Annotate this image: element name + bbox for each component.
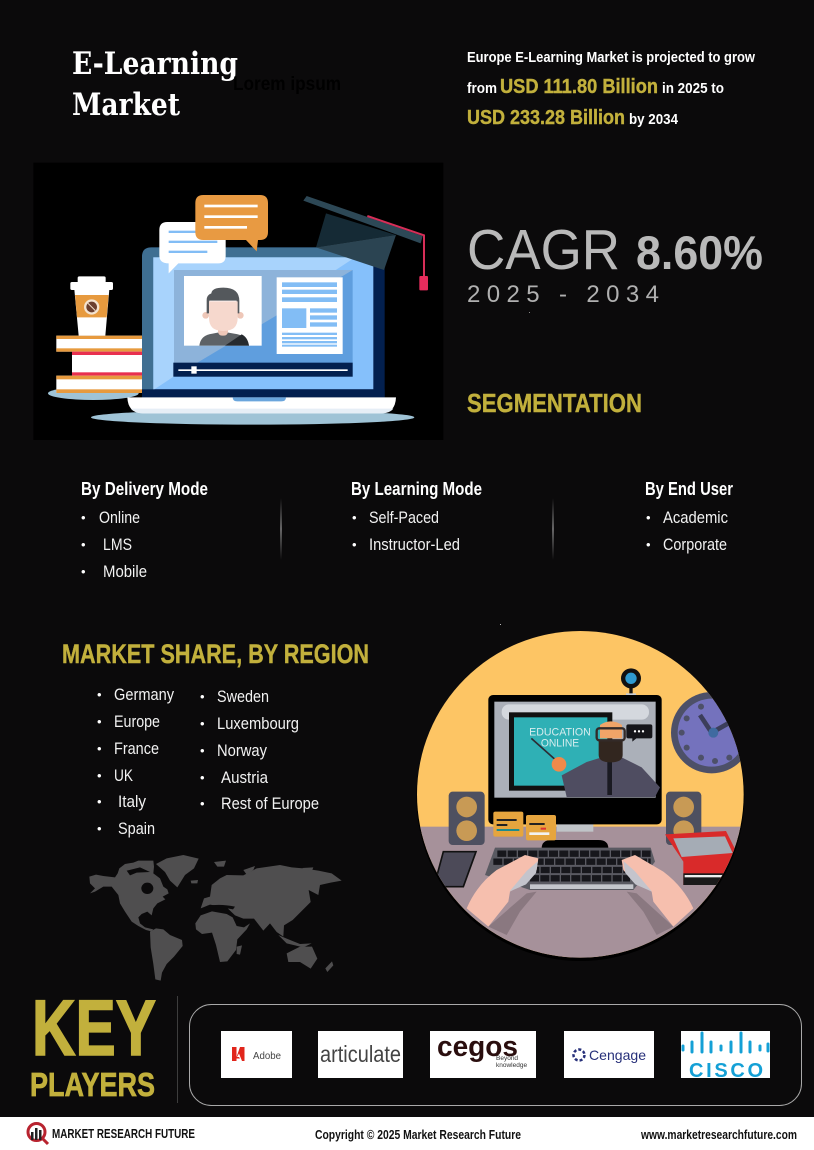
segment column: by end user: •	[646, 510, 651, 525]
world map	[89, 855, 342, 981]
market projection text: USD 111.80 Billion	[500, 75, 658, 98]
logo: Adobe	[221, 1031, 292, 1078]
region list: first column: Europe	[114, 713, 160, 731]
icon: stacked books	[56, 336, 142, 393]
market projection text: from	[467, 80, 497, 97]
laptop base	[127, 389, 396, 413]
region list: first column: •	[97, 768, 102, 783]
region list: second column: •	[200, 743, 205, 758]
logo: cegos: knowledge	[496, 1062, 527, 1069]
market projection text: in 2025 to	[662, 80, 724, 97]
segment column: by delivery mode	[81, 479, 208, 581]
market projection text	[467, 49, 755, 129]
tablet	[434, 852, 476, 887]
icon: white chat bubble	[159, 222, 226, 273]
logo: Adobe: Adobe	[253, 1050, 281, 1062]
illustration: laptop with online lesson	[33, 163, 443, 440]
market share heading: MARKET SHARE, BY REGION	[62, 639, 369, 669]
market projection text: by 2034	[629, 111, 679, 128]
region list: first column	[97, 686, 175, 838]
region list: first column: •	[97, 821, 102, 836]
segment column: by learning mode: •	[352, 537, 357, 552]
logo: cegos: cegos	[437, 1031, 518, 1063]
segment column: by learning mode: By Learning Mode	[351, 479, 482, 499]
region list: first column: •	[97, 687, 102, 702]
keyboard	[485, 848, 655, 890]
illustration: online education desk scene	[416, 631, 744, 961]
region list: second column: •	[200, 770, 205, 785]
logo: Cengage: Cengage	[589, 1047, 646, 1063]
title	[72, 46, 238, 123]
icon: orange chat bubble	[195, 195, 268, 251]
region list: first column: Germany	[114, 686, 175, 704]
video seek bar	[173, 363, 353, 377]
segment column: by learning mode: Instructor-Led	[369, 536, 460, 554]
segment column: by end user	[645, 479, 733, 554]
segment column: by delivery mode: By Delivery Mode	[81, 479, 208, 499]
footer: Copyright © 2025 Market Research Future	[315, 1128, 521, 1142]
logo: Cisco: CISCO	[689, 1060, 763, 1082]
footer: MARKET RESEARCH FUTURE	[52, 1127, 195, 1141]
document tile	[277, 277, 343, 354]
icon: brand logo	[28, 1124, 48, 1144]
region list: first column: Italy	[118, 793, 147, 811]
desk	[420, 826, 740, 958]
logo: articulate: articulate	[320, 1041, 401, 1067]
footer	[0, 1117, 814, 1150]
key players heading	[30, 983, 156, 1103]
hands	[467, 855, 693, 935]
key players heading: KEY	[32, 983, 156, 1072]
icon: coffee cup	[70, 276, 113, 336]
segment column: by delivery mode: •	[81, 510, 86, 525]
segment column: by learning mode	[351, 479, 482, 554]
segment column: by end user: Academic	[663, 509, 728, 527]
logo: cegos	[430, 1031, 536, 1078]
region list: second column: •	[200, 716, 205, 731]
speakers	[449, 792, 701, 845]
red book	[665, 831, 736, 885]
market projection text: Europe E-Learning Market is projected to grow	[467, 49, 755, 66]
logo: articulate	[318, 1031, 403, 1078]
region list: first column: France	[114, 740, 159, 758]
segment column: by delivery mode: •	[81, 537, 86, 552]
key players heading: PLAYERS	[30, 1066, 155, 1103]
monitor	[488, 695, 662, 848]
logo: Cengage	[564, 1031, 654, 1078]
webcam	[621, 668, 641, 695]
segment column: by end user: Corporate	[663, 536, 727, 554]
region list: first column: •	[97, 741, 102, 756]
CAGR figure: 2025 - 2034	[467, 281, 659, 308]
icon: graduation cap	[303, 196, 428, 290]
region list: first column: UK	[114, 767, 133, 785]
monitor: EDUCATION	[529, 727, 591, 739]
segmentation heading: SEGMENTATION	[467, 388, 642, 418]
title: Market	[72, 87, 181, 123]
laptop lid	[142, 247, 385, 397]
logo: cegos: Beyond	[496, 1055, 518, 1062]
wall clock	[671, 692, 740, 774]
panel: key player logos	[190, 1004, 802, 1106]
segment column: by end user: •	[646, 537, 651, 552]
region list: second column: Austria	[221, 769, 269, 787]
region list: second column	[200, 688, 319, 813]
region list: second column: Norway	[217, 742, 268, 760]
region list: first column: Spain	[118, 820, 155, 838]
logo: Cisco	[681, 1031, 770, 1082]
region list: second column: Luxembourg	[217, 715, 299, 733]
segment column: by delivery mode: LMS	[103, 536, 132, 554]
region list: first column: •	[97, 794, 102, 809]
region list: second column: •	[200, 796, 205, 811]
segment column: by learning mode: •	[352, 510, 357, 525]
CAGR figure	[467, 218, 763, 308]
title: E-Learning	[72, 46, 238, 82]
notes cards	[493, 812, 556, 840]
video tile: presenter	[184, 276, 262, 346]
monitor: ONLINE	[541, 737, 579, 749]
region list: first column: •	[97, 714, 102, 729]
region list: second column: •	[200, 689, 205, 704]
placeholder text: Lorem ipsum	[233, 74, 341, 95]
region list: second column: Rest of Europe	[221, 795, 319, 813]
teacher	[552, 721, 660, 797]
segment column: by delivery mode: Online	[99, 509, 140, 527]
market projection text: USD 233.28 Billion	[467, 106, 625, 129]
CAGR figure: CAGR	[467, 218, 620, 282]
segment column: by learning mode: Self-Paced	[369, 509, 439, 527]
segment column: by delivery mode: •	[81, 564, 86, 579]
CAGR figure: 8.60%	[636, 226, 763, 279]
segment column: by end user: By End User	[645, 479, 733, 499]
segment column: by delivery mode: Mobile	[103, 563, 147, 581]
region list: second column: Sweden	[217, 688, 269, 706]
